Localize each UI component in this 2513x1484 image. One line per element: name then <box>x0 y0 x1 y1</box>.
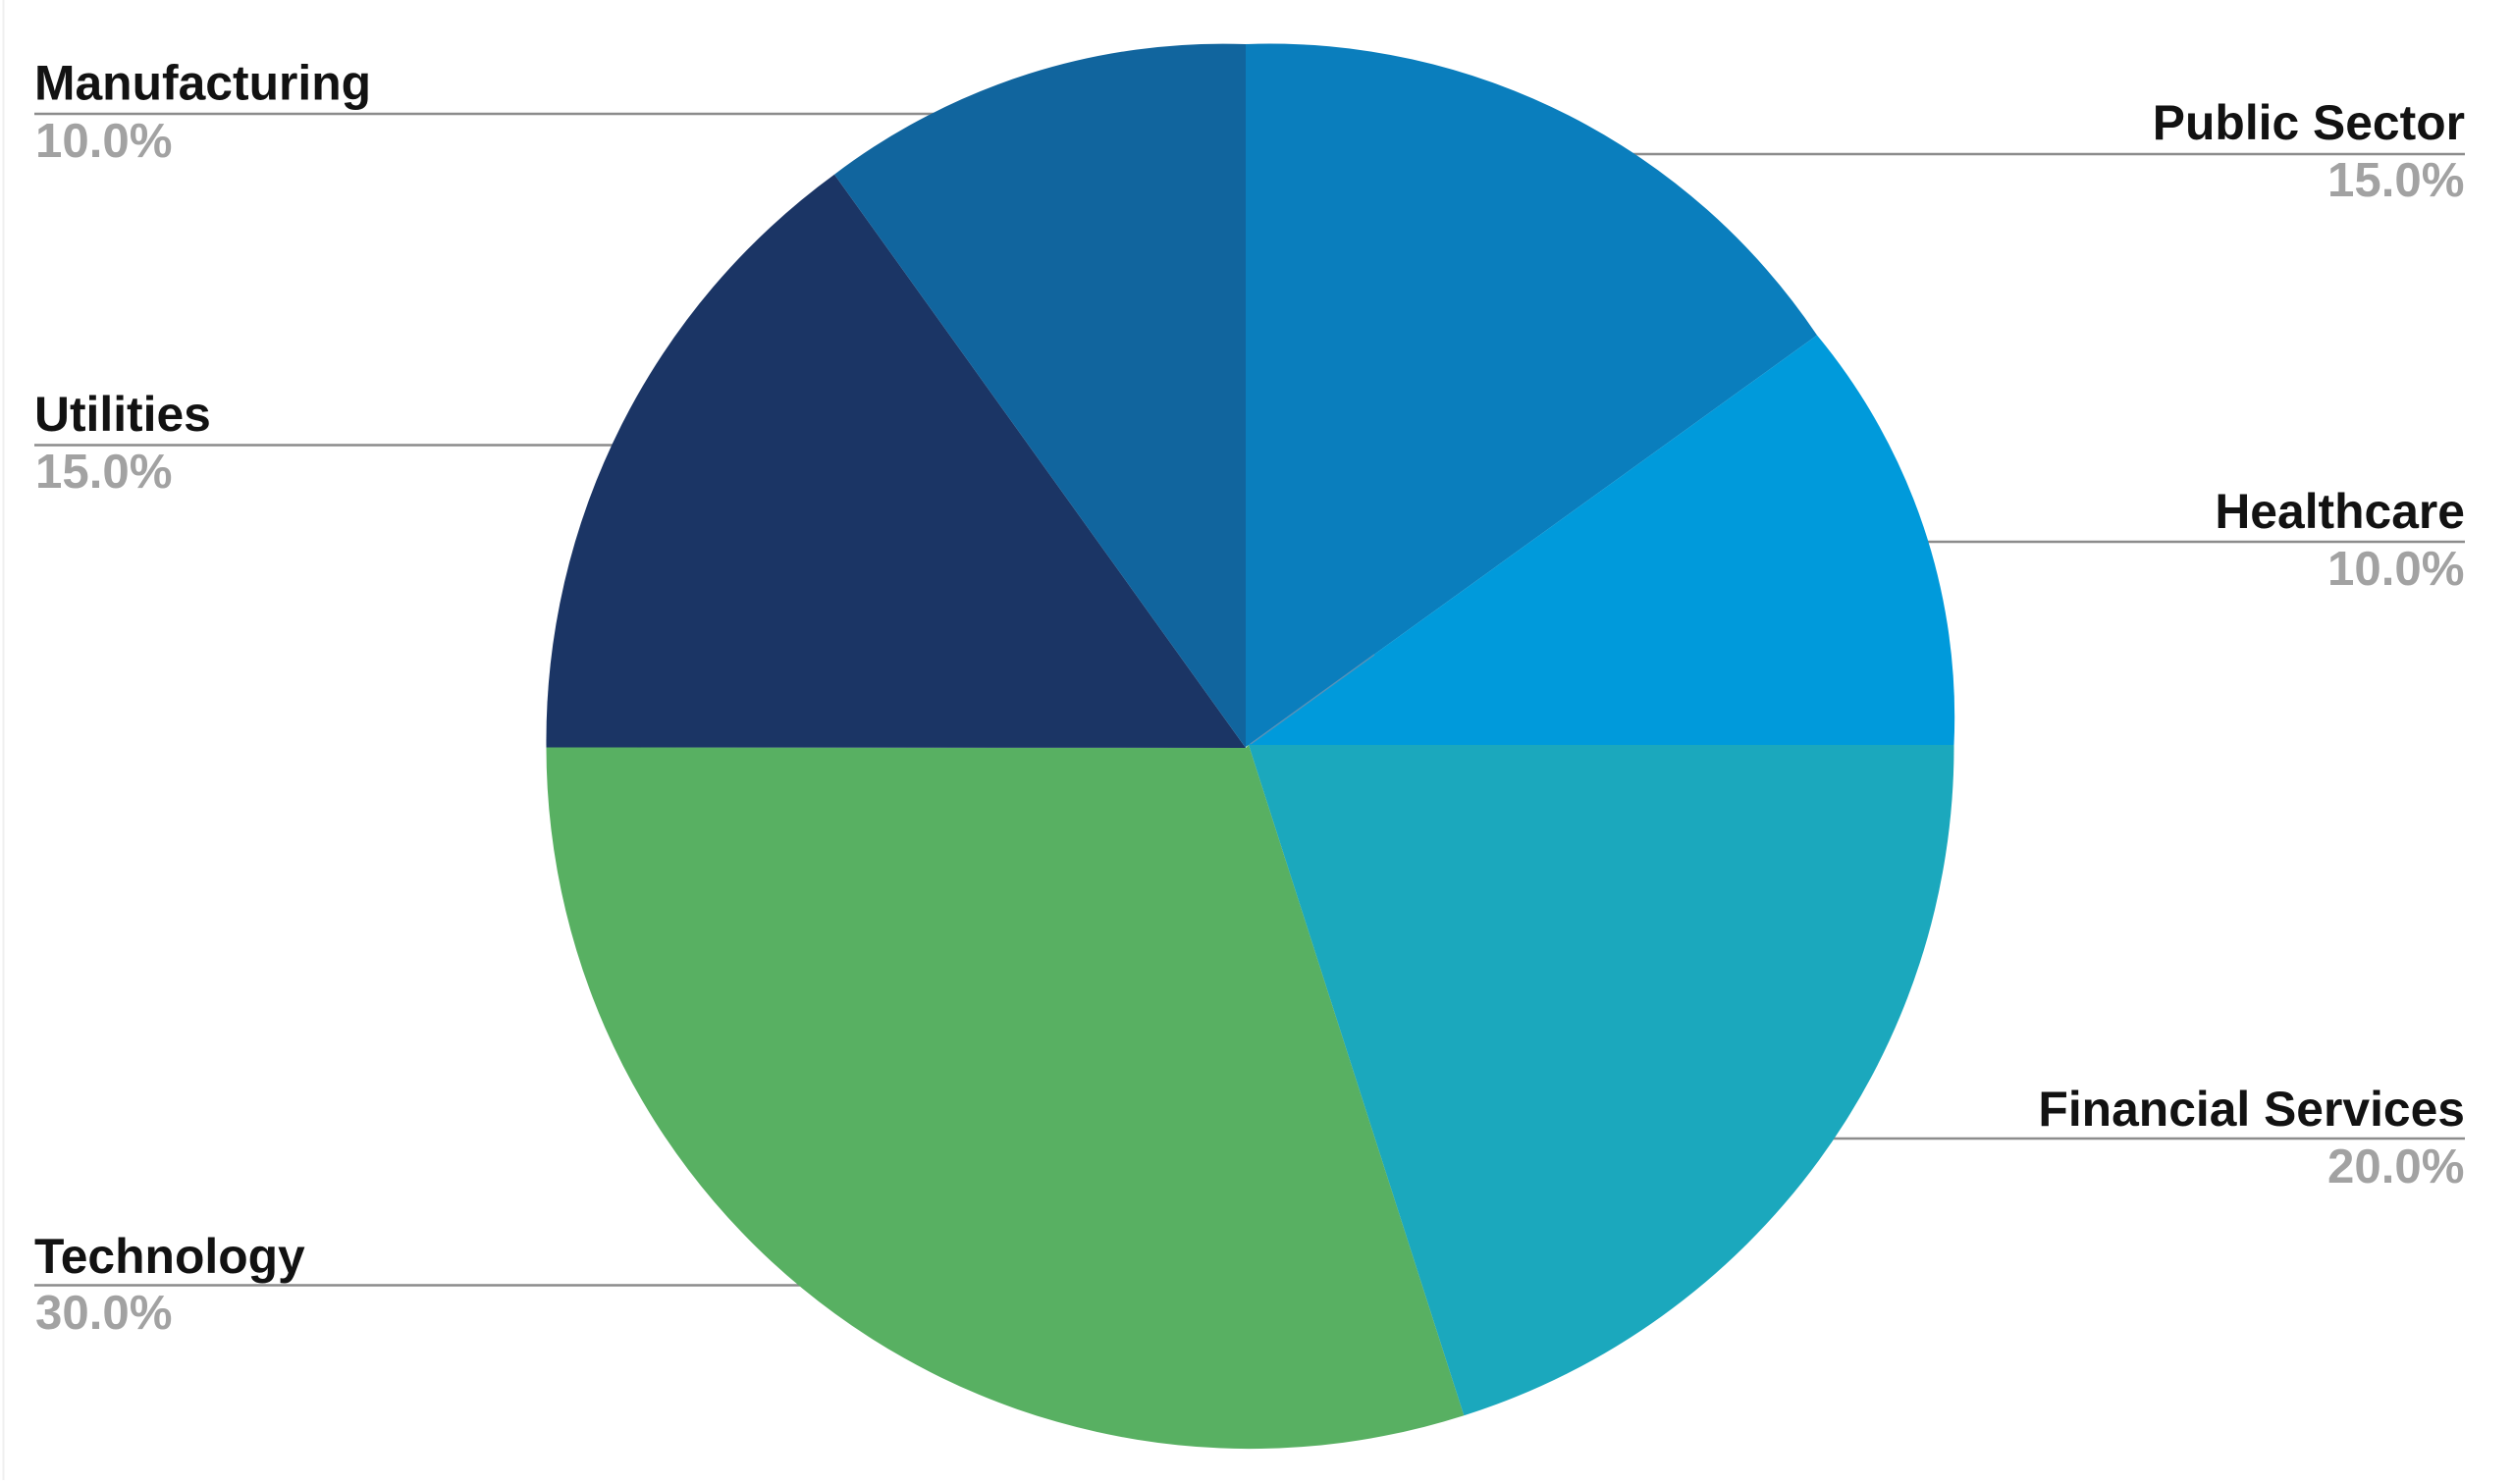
label: Public Sector: Public Sector <box>2153 95 2465 150</box>
label: Financial Services: Financial Services <box>2038 1082 2465 1137</box>
label: Technology: 30.0% <box>35 1286 172 1340</box>
label: Financial Services: 20.0% <box>2327 1140 2464 1193</box>
slice: Public Sector 15% <box>1246 44 1817 747</box>
slice: Manufacturing 10% <box>834 44 1246 748</box>
pie chart <box>546 44 1954 1449</box>
label: Healthcare: 10.0% <box>2327 542 2464 596</box>
label: Utilities: 15.0% <box>35 445 172 499</box>
slice: Utilities 15% <box>546 175 1246 748</box>
label: Technology <box>34 1229 305 1340</box>
label: Utilities: Utilities <box>34 387 211 442</box>
label: Public Sector <box>2153 95 2465 207</box>
label: Manufacturing <box>34 55 371 168</box>
label: Public Sector: 15.0% <box>2327 153 2464 207</box>
slice: Technology 30% <box>546 745 1464 1449</box>
label: Manufacturing: 10.0% <box>35 114 172 168</box>
label: Healthcare <box>2215 484 2465 596</box>
slice: Healthcare 10% <box>1249 336 1954 745</box>
label: Technology: Technology <box>34 1229 305 1284</box>
slice: Financial Services 20% <box>1249 745 1954 1415</box>
label: Utilities <box>34 387 211 499</box>
label: Manufacturing: Manufacturing <box>34 55 371 110</box>
label: Financial Services <box>2038 1082 2465 1193</box>
label: Healthcare: Healthcare <box>2215 484 2465 539</box>
leader lines behind the pie <box>34 114 2465 1286</box>
